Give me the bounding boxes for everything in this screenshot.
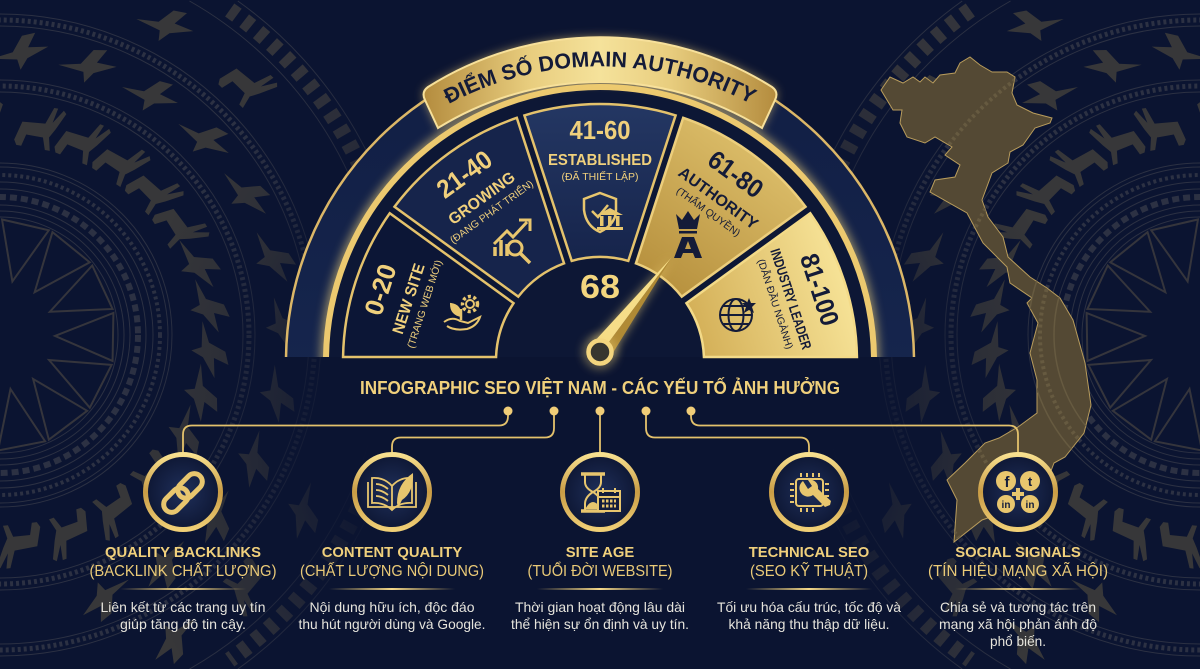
icon: social networks [980,454,1056,530]
factor: technical seo: (SEO KỸ THUẬT) [750,563,868,580]
factor: technical seo: khả năng thu thập dữ liệu. [728,616,890,632]
segment 41-60 [524,104,676,261]
icon: chip and wrench [772,454,846,530]
factor: social signals: SOCIAL SIGNALS [955,545,1081,561]
label 0-20 [352,241,445,350]
label 81-100: INDUSTRY LEADER [767,246,815,351]
factor: content quality: Nội dung hữu ích, độc đáo [310,599,475,615]
label 21-40: GROWING [446,169,519,229]
factor: content quality: (CHẤT LƯỢNG NỘI DUNG) [300,563,484,580]
factor: quality backlinks: giúp tăng độ tin cậy. [120,616,246,632]
label 41-60: 41-60 [570,115,630,145]
factor: quality backlinks: QUALITY BACKLINKS [105,545,261,561]
icon: chain link [146,454,220,530]
connectors [183,406,1018,452]
factor: site age: (TUỔI ĐỜI WEBSITE) [528,562,672,580]
gauge [284,83,916,374]
label 81-100: 81-100 [794,250,845,329]
label 0-20: (TRANG WEB MỚI) [404,258,445,350]
factor: technical seo: TECHNICAL SEO [749,545,869,561]
label 61-80: AUTHORITY [675,164,761,233]
factor: content quality: CONTENT QUALITY [322,545,462,561]
banner title: ĐIỂM SỐ DOMAIN AUTHORITY [443,52,758,104]
drum pattern: left [0,0,410,669]
icon: shield and bank [584,193,623,232]
factor: social signals [928,454,1108,649]
icon: book and quill [354,454,430,530]
icon: social networks: t [1028,474,1033,489]
icon: seedling in hand [444,296,480,330]
factor: social signals: (TÍN HIỆU MẠNG XÃ HỘI) [928,563,1108,580]
label 81-100 [753,235,850,356]
factor: content quality: thu hút người dùng và Google. [298,616,486,632]
factor: social signals: Chia sẻ và tương tác trên [940,599,1096,615]
label 61-80 [667,134,783,245]
factor: social signals: mạng xã hội phản ánh độ [939,616,1097,632]
gauge outer band [284,83,916,357]
segment 21-40 [388,109,602,324]
needle [587,257,672,365]
icon: social networks: in [1026,500,1034,511]
icon: globe with star [720,298,756,331]
factor: site age: SITE AGE [566,545,634,561]
drum pattern: right [790,0,1200,669]
label 21-40: 21-40 [431,144,498,204]
factor: technical seo: Tối ưu hóa cấu trúc, tốc độ và [717,599,901,615]
label 21-40: (ĐANG PHÁT TRIỂN) [447,177,536,246]
segment 81-100 [672,210,868,402]
label 0-20: 0-20 [358,260,403,319]
icon: social networks: in [1002,500,1010,511]
icon: hourglass and calendar [562,454,638,530]
factor: site age [511,454,689,632]
icon: social networks: f [1004,474,1010,491]
label 81-100: (DẪN ĐẦU NGÀNH) [755,257,796,351]
label 0-20: NEW SITE [390,261,429,336]
score value: 68 [580,268,620,305]
label 41-60: (ĐÃ THIẾT LẬP) [562,170,638,183]
factor: site age: thể hiện sự ổn định và uy tín. [511,616,689,632]
map of Vietnam [880,56,1092,543]
icon: crown and letter A [674,211,702,258]
banner [417,30,783,132]
segment 0-20 [332,210,528,402]
segment 61-80 [598,109,812,324]
factor: content quality [298,454,486,632]
factor: social signals: phổ biến. [990,633,1046,649]
factor: quality backlinks: Liên kết từ các trang uy tín [100,599,266,615]
label 41-60: ESTABLISHED [548,152,652,169]
label 41-60 [548,115,652,183]
main subtitle: INFOGRAPHIC SEO VIỆT NAM - CÁC YẾU TỐ ẢNH HƯỞNG [360,377,840,398]
label 61-80: (THẨM QUYỀN) [674,184,743,239]
label 61-80: 61-80 [702,144,769,204]
label 21-40 [415,133,536,246]
icon: growth chart [494,220,530,263]
factor: quality backlinks [90,454,276,632]
factor: technical seo [717,454,901,632]
factor: site age: Thời gian hoạt động lâu dài [515,599,685,615]
factor: quality backlinks: (BACKLINK CHẤT LƯỢNG) [90,563,276,580]
